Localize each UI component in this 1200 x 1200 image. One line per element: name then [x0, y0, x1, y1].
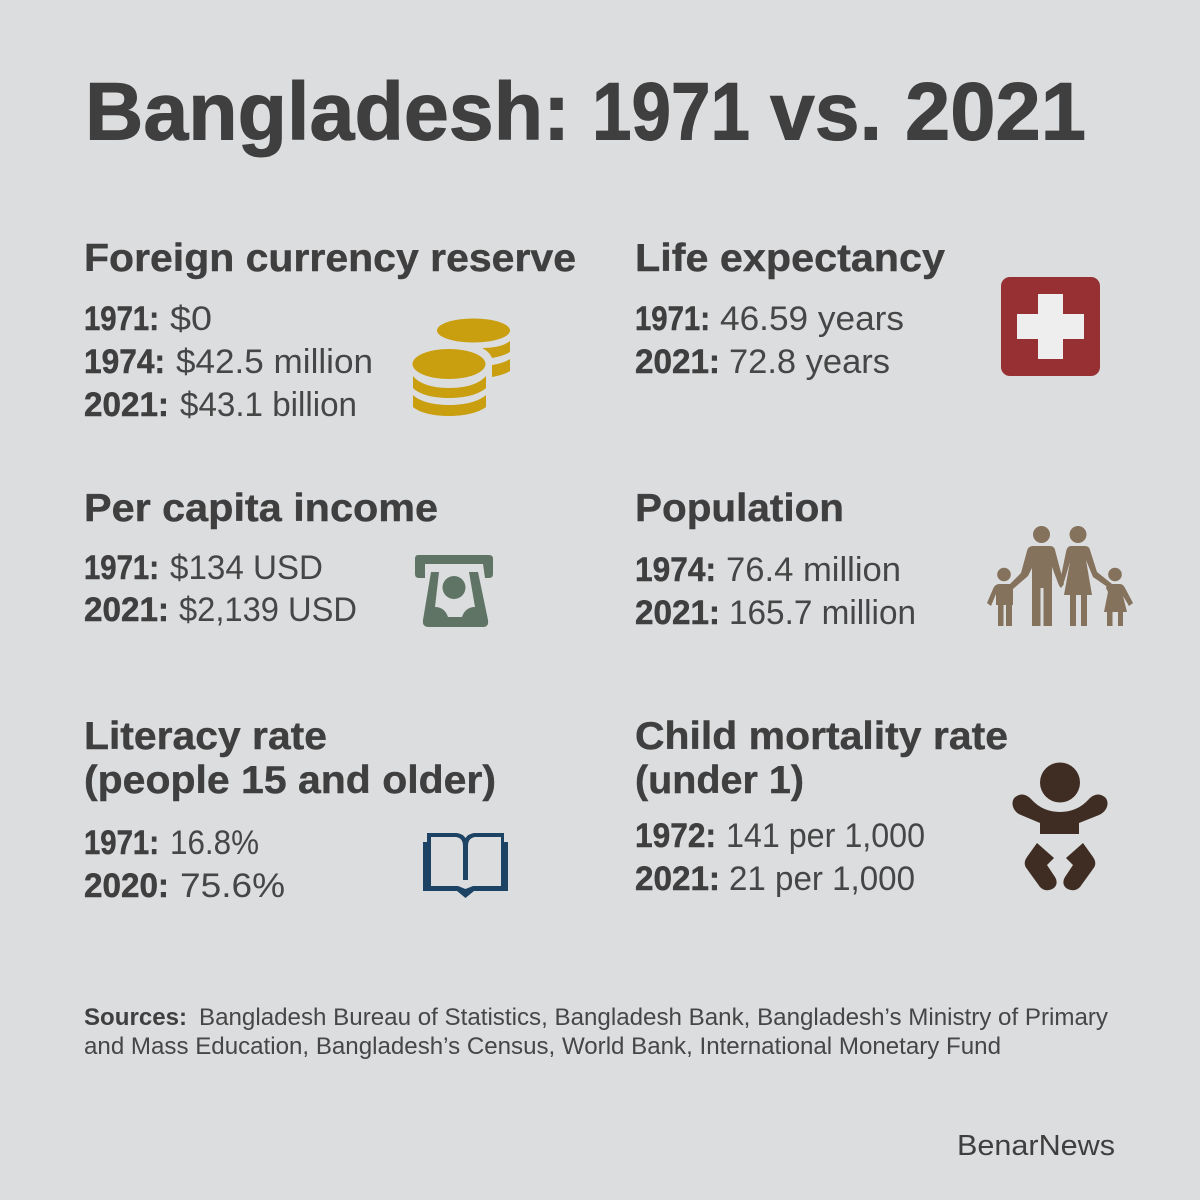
stats: per capita income: 1971: [84, 549, 159, 587]
girl [1104, 584, 1133, 626]
stats: population: 165.7 million [729, 594, 916, 632]
stats: foreign currency reserve: 2021: [84, 386, 169, 424]
stats: child mortality rate: 21 per 1,000 [729, 860, 915, 898]
panel: foreign currency reserve [84, 237, 576, 424]
stats: foreign currency reserve: 1971: [84, 300, 159, 338]
sources: and Mass Education, Bangladesh’s Census, World Bank, International Monetary Fund [84, 1033, 1001, 1060]
stats: population: 1974: [635, 551, 716, 589]
icon: gold coins [412, 318, 510, 416]
stats: child mortality rate [635, 817, 925, 898]
stats: life expectancy [635, 300, 904, 381]
stats: life expectancy: 2021: [635, 343, 720, 381]
heading: child mortality rate: (under 1) [635, 759, 804, 802]
stats: child mortality rate: 2021: [635, 860, 720, 898]
heading: child mortality rate: Child mortality rate [635, 715, 1008, 758]
father [1009, 546, 1064, 626]
stats: literacy rate: 2020: [84, 867, 169, 905]
heading: life expectancy: Life expectancy [635, 237, 945, 280]
stats: life expectancy: 46.59 years [720, 300, 904, 338]
heading: population: Population [635, 487, 844, 530]
stats: child mortality rate: 1972: [635, 817, 716, 855]
heading: literacy rate: Literacy rate [84, 715, 327, 758]
title: Bangladesh: [85, 66, 570, 158]
title: 1971 [592, 66, 750, 158]
stats: per capita income: $134 USD [170, 549, 323, 587]
panel: population [635, 487, 1133, 632]
stats: literacy rate: 75.6% [180, 867, 285, 905]
stats: life expectancy: 72.8 years [729, 343, 890, 381]
stats: life expectancy: 1971: [635, 300, 710, 338]
stats: foreign currency reserve: 1974: [84, 343, 165, 381]
title: 2021 [905, 66, 1086, 158]
title: vs. [770, 66, 882, 158]
boy [987, 584, 1013, 626]
icon: baby [1012, 762, 1108, 890]
icon: family [987, 526, 1133, 626]
icon: open book [423, 833, 508, 898]
stats: foreign currency reserve [84, 300, 373, 424]
sources [84, 1004, 1108, 1060]
stats: population: 2021: [635, 594, 720, 632]
stats: foreign currency reserve: $0 [170, 300, 212, 338]
panel: child mortality rate [635, 715, 1108, 898]
mother [1059, 546, 1112, 626]
icon: medical cross [1001, 277, 1100, 376]
stats: foreign currency reserve: $43.1 billion [180, 386, 357, 424]
stats: population [635, 551, 916, 632]
stats: literacy rate [84, 824, 285, 905]
credit: BenarNews: BenarNews [957, 1130, 1115, 1162]
sources: Sources: [84, 1004, 187, 1031]
panel: per capita income [84, 487, 493, 629]
stats: literacy rate: 16.8% [170, 824, 259, 862]
icon: cash machine [415, 555, 493, 627]
stats: population: 76.4 million [726, 551, 901, 589]
stats: child mortality rate: 141 per 1,000 [726, 817, 925, 855]
title [85, 66, 1086, 158]
stats: per capita income [84, 549, 357, 629]
stats: per capita income: $2,139 USD [179, 591, 357, 629]
stats: literacy rate: 1971: [84, 824, 159, 862]
heading: literacy rate: (people 15 and older) [84, 759, 496, 802]
heading: literacy rate [84, 715, 496, 802]
heading: foreign currency reserve: Foreign currency reserve [84, 237, 576, 280]
panel: life expectancy [635, 237, 1100, 381]
heading: child mortality rate [635, 715, 1008, 802]
panel: literacy rate [84, 715, 508, 905]
sources: Bangladesh Bureau of Statistics, Bangladesh Bank, Bangladesh’s Ministry of Primary [199, 1004, 1108, 1031]
heading: per capita income: Per capita income [84, 487, 438, 530]
stats: per capita income: 2021: [84, 591, 169, 629]
stats: foreign currency reserve: $42.5 million [176, 343, 373, 381]
